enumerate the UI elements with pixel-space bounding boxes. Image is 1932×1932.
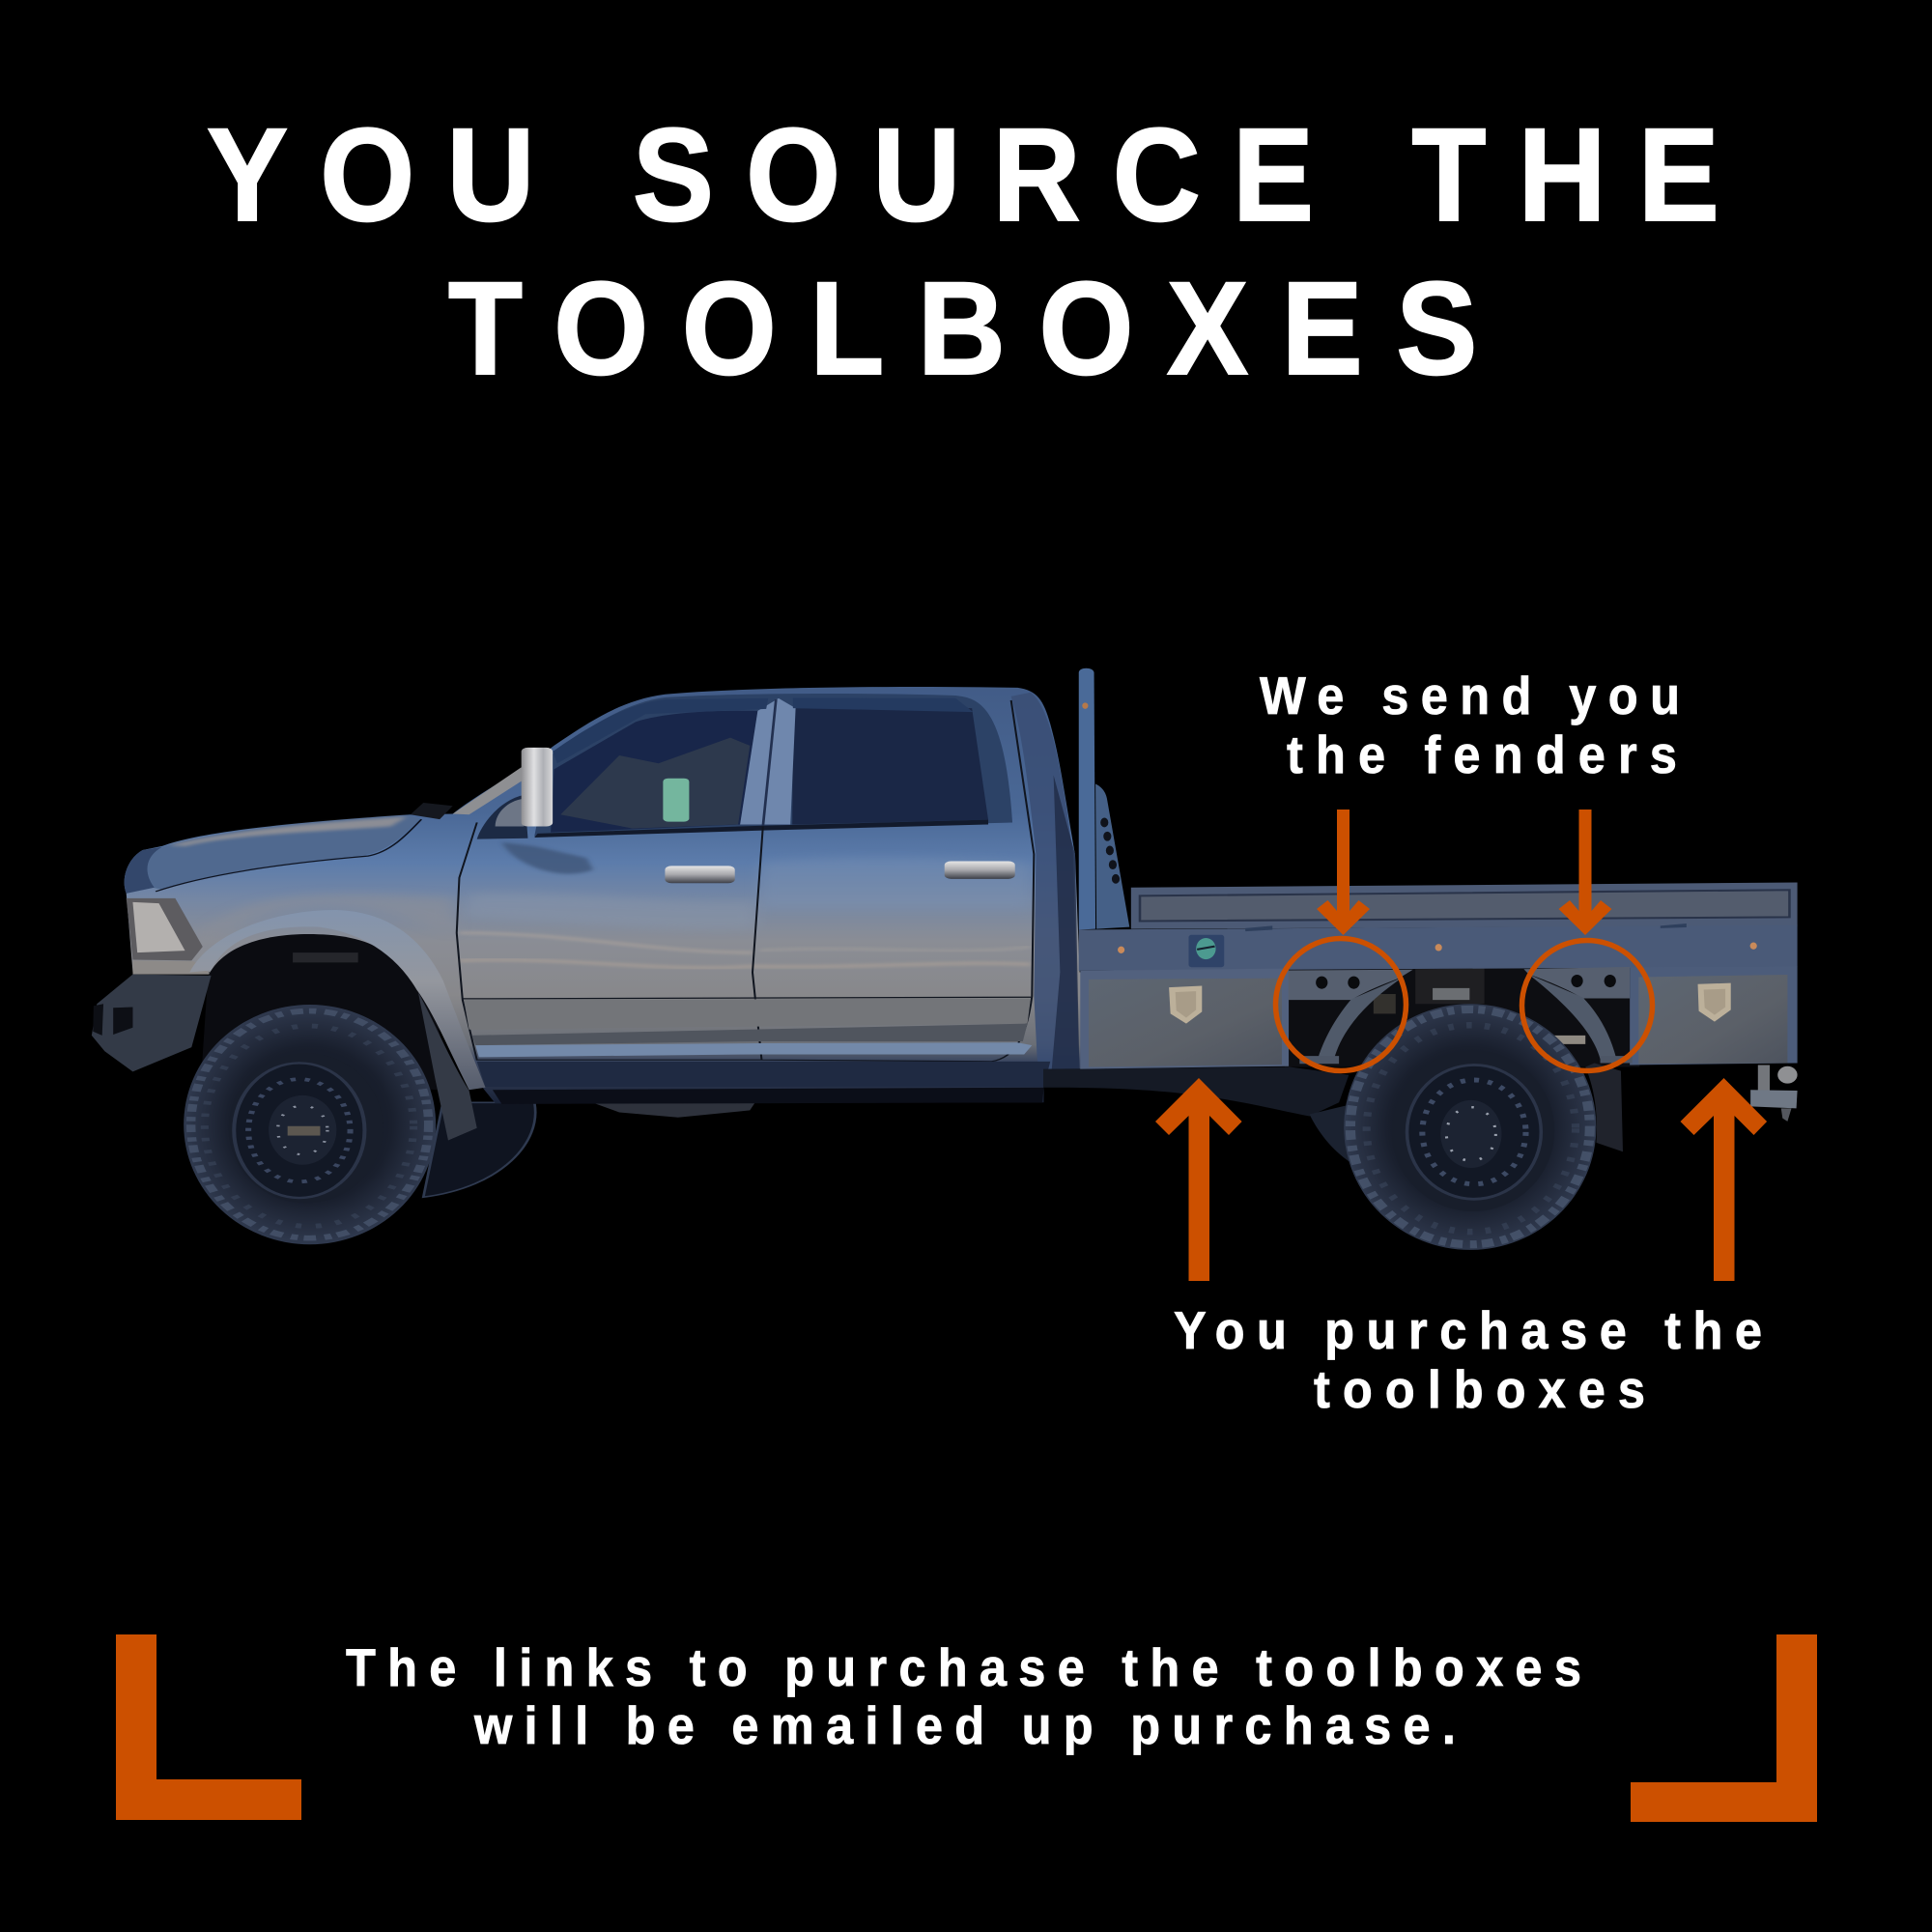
- rack gusset: [1095, 783, 1129, 929]
- hood nose: [125, 847, 162, 894]
- underbody: [586, 1100, 756, 1118]
- left toolbox latch: [1169, 985, 1202, 1024]
- fuel door: [1189, 935, 1224, 967]
- circle: right fender: [1522, 941, 1652, 1070]
- window visors: [553, 697, 973, 763]
- left toolbox door: [1089, 979, 1282, 1067]
- window tree reflection: [560, 738, 750, 829]
- rear tire: [1344, 1004, 1596, 1250]
- bracket: bottom right: [1631, 1634, 1817, 1822]
- truck: cab and front: [92, 687, 1101, 1244]
- title: TOOLBOXES: [448, 254, 1477, 402]
- arrow: down to right fender: [1559, 810, 1611, 935]
- callout: you purchase the toolboxes: [1174, 1301, 1762, 1419]
- frame underside: [1043, 1067, 1349, 1117]
- circle: left fender: [1275, 939, 1406, 1070]
- panel reflections: [201, 842, 1031, 968]
- trailer hitch: [1750, 1065, 1798, 1122]
- title: [207, 100, 1719, 402]
- far side rear tire: [1310, 1102, 1359, 1168]
- arrow: down to left fender: [1317, 810, 1370, 935]
- right toolbox frame: [1630, 966, 1798, 1065]
- window frame: [534, 694, 1012, 837]
- lower dark band: [471, 1024, 1028, 1045]
- bumper fog recess: [93, 1004, 132, 1036]
- cab body: [125, 687, 1101, 1103]
- running board: [493, 1088, 1043, 1104]
- headlight highlights: [132, 902, 185, 952]
- under bed darkness: [1285, 966, 1639, 1067]
- lower body molding: [464, 999, 1031, 1030]
- front tire: [184, 1005, 436, 1244]
- rear window: [792, 708, 988, 824]
- rack amber light: [1082, 702, 1088, 709]
- door handles: [665, 861, 1015, 883]
- callout: you purchase the toolboxes: toolboxes: [1314, 1360, 1645, 1419]
- suspension detail: [293, 952, 358, 962]
- wheel well: [201, 934, 449, 1091]
- window sill: [534, 820, 988, 838]
- callout: we send you the fenders: We send you: [1260, 667, 1680, 725]
- callout: you purchase the toolboxes: You purchase the: [1174, 1301, 1762, 1360]
- interior mirror tag: [663, 779, 689, 822]
- seam hinges: [1245, 923, 1687, 931]
- windshield edge: [453, 767, 525, 814]
- lower light band: [475, 1042, 1032, 1057]
- hood seam: [156, 819, 421, 892]
- footer note: The links to purchase the toolboxes: [346, 1638, 1581, 1697]
- front bumper: [92, 975, 212, 1071]
- hood: [140, 815, 420, 890]
- bed upper inset panel: [1140, 890, 1789, 921]
- fender flare: [189, 910, 485, 1090]
- pillar seam: [763, 699, 776, 827]
- right toolbox latch: [1698, 983, 1731, 1022]
- right toolbox door: [1638, 975, 1787, 1064]
- grille strip: [132, 960, 212, 975]
- marker lights: [1118, 943, 1757, 953]
- front window: [551, 711, 757, 833]
- headlight: [127, 898, 203, 960]
- far side front tire: [423, 1102, 535, 1197]
- door lines: [457, 700, 1034, 1062]
- drivetrain detail: [1374, 968, 1585, 1044]
- rack holes: [1100, 818, 1120, 884]
- headache rack post: [1079, 668, 1095, 929]
- mirror housing: [496, 799, 524, 827]
- arrow: up to right toolbox: [1681, 1078, 1767, 1281]
- b pillar: [740, 698, 796, 824]
- callout: we send you the fenders: the fenders: [1287, 725, 1677, 784]
- mirror mount: [477, 795, 527, 839]
- right fender bracket: [1523, 967, 1633, 1063]
- bracket: bottom left: [116, 1634, 301, 1820]
- bed mid band: [1079, 925, 1798, 971]
- footer note: [346, 1638, 1581, 1755]
- rocker: [477, 1062, 1050, 1087]
- truck: flatbed and rear: [1043, 668, 1798, 1250]
- mud flap: [418, 992, 477, 1140]
- left toolbox frame: [1080, 968, 1289, 1069]
- rear cab edge shadow: [1011, 693, 1080, 1087]
- cowl vent: [411, 803, 453, 819]
- title: YOU SOURCE THE: [207, 100, 1719, 248]
- footer note: will be emailed up purchase.: [473, 1696, 1456, 1755]
- arrow: up to left toolbox: [1155, 1078, 1242, 1281]
- callout: we send you the fenders: [1260, 667, 1680, 784]
- rear cab dark strip: [1050, 775, 1080, 1086]
- left fender bracket: [1289, 970, 1413, 1064]
- bed upper rail: [1131, 882, 1798, 929]
- side mirror: [522, 748, 553, 827]
- hood highlight: [169, 816, 407, 846]
- rear mud flap: [1585, 1063, 1623, 1151]
